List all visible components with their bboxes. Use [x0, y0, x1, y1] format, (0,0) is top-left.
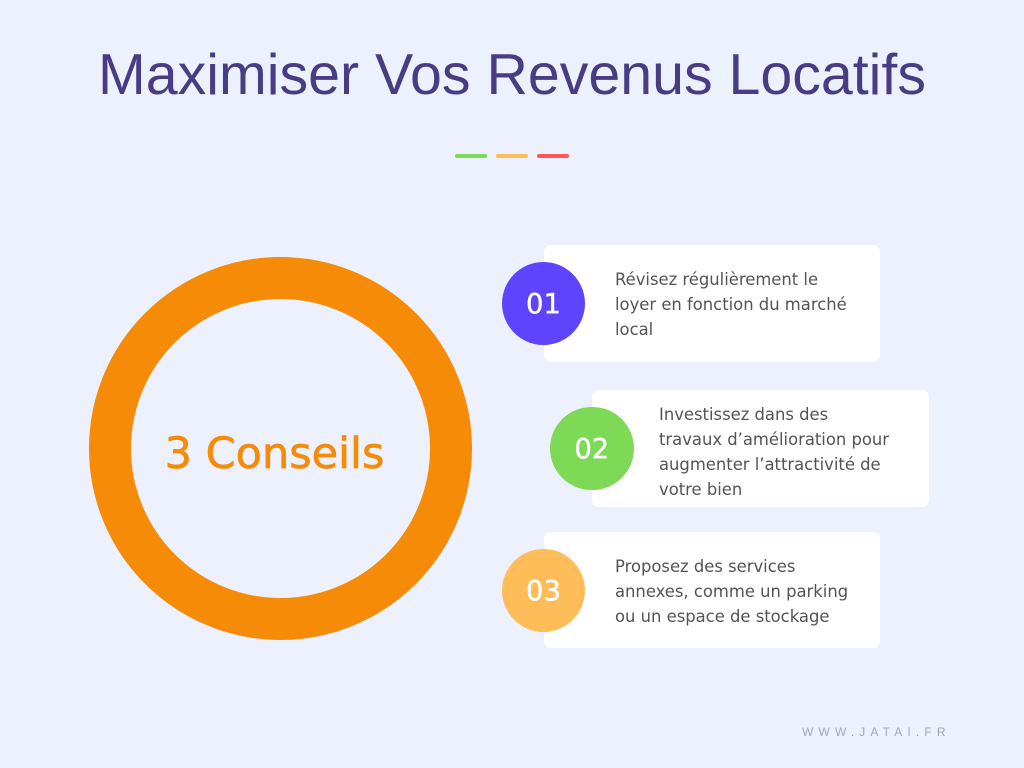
tip 2	[550, 390, 929, 507]
tip 2 text	[659, 405, 889, 499]
tip 2 number: 02	[574, 434, 609, 465]
orange ring	[89, 257, 472, 640]
tip 1	[502, 245, 880, 362]
tip 2 text: augmenter l’attractivité de	[659, 455, 881, 474]
tip 3	[502, 532, 880, 648]
tip 1 text: Révisez régulièrement le	[615, 270, 818, 289]
tip 2 text: Investissez dans des	[659, 405, 828, 424]
tip 1 text: local	[615, 320, 653, 339]
tip 3 card	[544, 532, 880, 648]
tip 3 text: Proposez des services	[615, 557, 795, 576]
tip 2 text: travaux d’amélioration pour	[659, 430, 889, 449]
ring label: 3 Conseils	[165, 429, 384, 479]
decorative colored dashes	[455, 154, 569, 158]
footer website: WWW.JATAI.FR	[802, 725, 951, 739]
tip 1 text	[615, 270, 847, 339]
tip 3 number: 03	[526, 576, 561, 607]
tip 1 text: loyer en fonction du marché	[615, 295, 847, 314]
tip 3 number	[502, 549, 585, 632]
tip 1 card	[544, 245, 880, 362]
tip 1 number: 01	[526, 289, 561, 320]
tip 3 text: annexes, comme un parking	[615, 582, 848, 601]
title: Maximiser Vos Revenus Locatifs	[98, 43, 926, 107]
tip 2 number	[550, 407, 634, 490]
tip 1 number	[502, 262, 585, 345]
tip 2 text: votre bien	[659, 480, 742, 499]
tip 2 card	[592, 390, 929, 506]
tip 3 text	[615, 557, 848, 626]
tip 3 text: ou un espace de stockage	[615, 607, 829, 626]
